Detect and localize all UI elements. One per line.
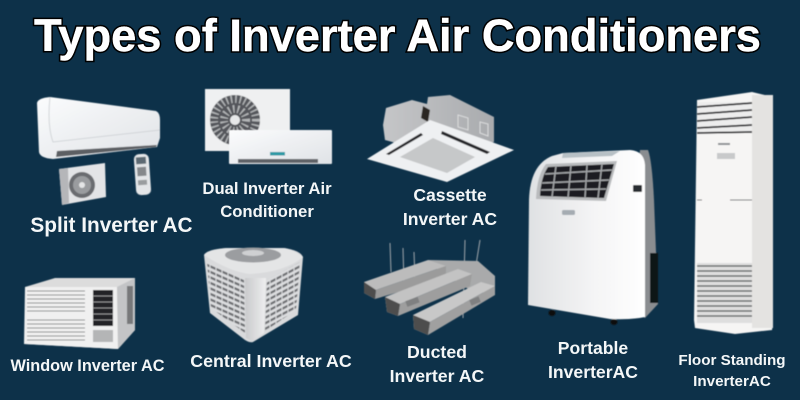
label: floor standing: Floor Standing	[678, 352, 786, 369]
label: ducted	[390, 342, 485, 386]
label: cassette	[403, 185, 497, 229]
panel: ducted	[364, 240, 495, 386]
icon: dual outdoor unit	[205, 89, 290, 151]
label: window: Window Inverter AC	[11, 357, 165, 375]
label: portable: Portable	[558, 338, 628, 358]
label: cassette: Inverter AC	[403, 209, 497, 229]
label: portable	[548, 338, 638, 382]
panel: dual inverter	[202, 89, 332, 221]
icon: window unit	[24, 278, 135, 349]
panel: portable	[528, 150, 658, 382]
icon: dual indoor unit	[229, 130, 332, 164]
icon: ducted system	[364, 240, 495, 335]
label: dual: Conditioner	[220, 202, 314, 221]
title: Types of Inverter Air Conditioners	[34, 10, 761, 61]
label: ducted: Ducted	[407, 342, 467, 362]
icon: cassette unit	[367, 95, 514, 182]
icon: split outdoor unit	[59, 163, 106, 205]
label: floor standing: InverterAC	[693, 373, 771, 390]
icon: split indoor unit	[37, 97, 160, 159]
panel: cassette	[367, 95, 514, 229]
icon: remote control	[134, 153, 151, 195]
panel: floor standing	[678, 92, 786, 390]
label: portable: InverterAC	[548, 362, 638, 382]
panel: split inverter AC	[30, 97, 193, 237]
label: floor standing	[678, 352, 786, 390]
title: Types of Inverter Air Conditioners	[34, 10, 761, 61]
icon: floor standing unit	[694, 92, 773, 334]
icon: central unit	[204, 248, 303, 342]
label: central: Central Inverter AC	[190, 351, 352, 371]
panel: window	[11, 278, 165, 375]
label: dual: Dual Inverter Air	[202, 179, 332, 198]
label: dual	[202, 179, 332, 221]
label: ducted: Inverter AC	[390, 366, 485, 386]
panel: central	[190, 248, 352, 371]
label: split: Split Inverter AC	[30, 214, 193, 237]
label: cassette: Cassette	[413, 185, 487, 205]
icon: portable unit	[528, 150, 658, 325]
